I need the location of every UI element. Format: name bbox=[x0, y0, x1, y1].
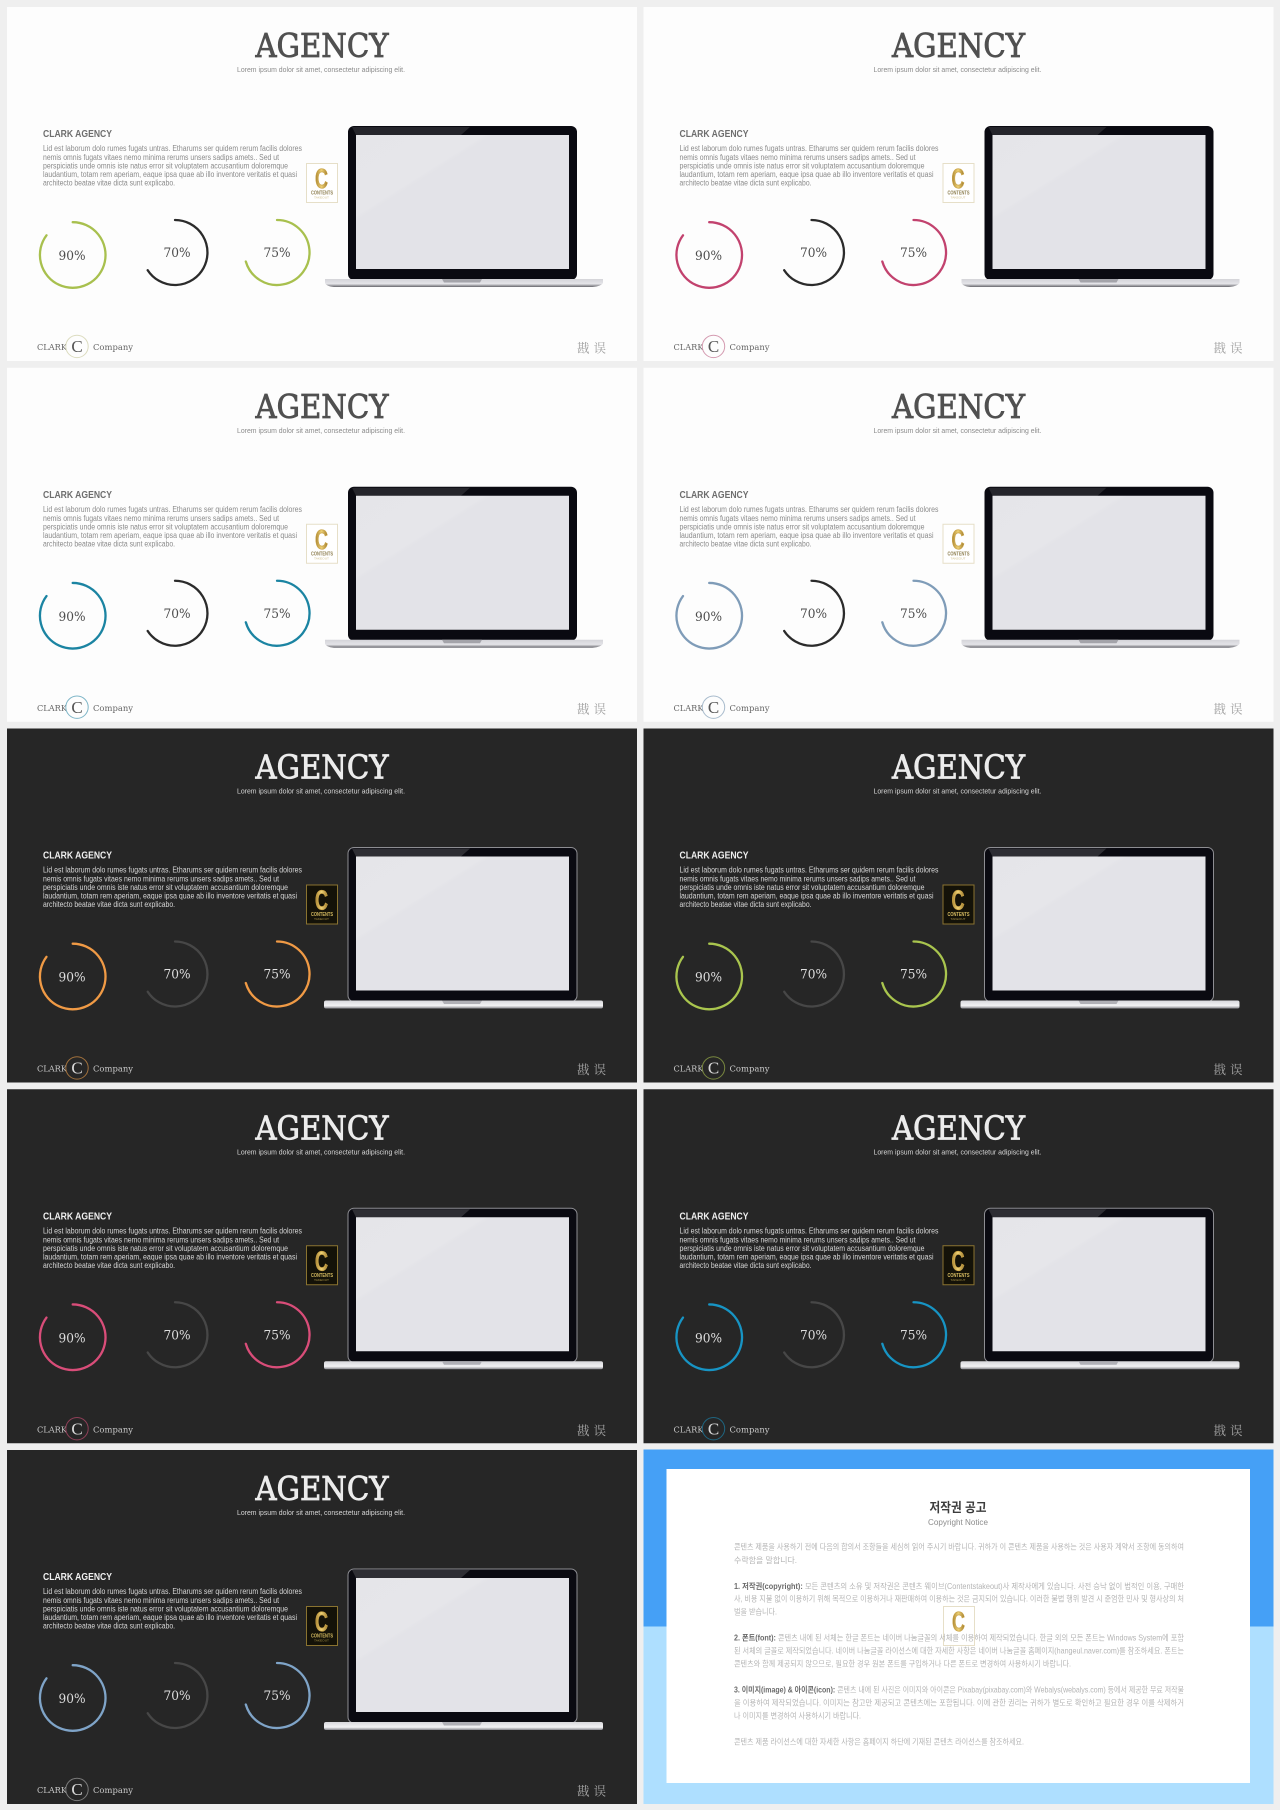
ring chart 70%: 70% bbox=[800, 968, 827, 982]
text block: nemis omnis fugats vitaes nemo minima rerums unsers sadips amets.. Sed ut bbox=[680, 514, 916, 523]
heading: CLARK AGENCY bbox=[680, 129, 749, 140]
laptop mockup bbox=[324, 1569, 603, 1730]
footer label: 戡 误 bbox=[577, 1421, 606, 1439]
text block: nemis omnis fugats vitaes nemo minima rerums unsers sadips amets.. Sed ut bbox=[43, 1235, 280, 1244]
text block: laudantium, totam rem aperiam, eaque ipsa quae ab illo inventore veritatis et quasi bbox=[43, 892, 297, 901]
copyright heading: 저작권 공고 bbox=[930, 1500, 987, 1515]
footer label: 戡 误 bbox=[577, 1782, 606, 1800]
footer logo bbox=[37, 696, 133, 718]
subtitle: Lorem ipsum dolor sit amet, consectetur adipiscing elit. bbox=[237, 426, 405, 435]
ring chart 70%: 70% bbox=[800, 1328, 827, 1343]
panel: light template, slate blue bbox=[644, 368, 1274, 722]
laptop mockup bbox=[324, 848, 603, 1008]
ring chart 75% bbox=[246, 581, 310, 646]
laptop mockup bbox=[960, 1208, 1240, 1369]
ring chart 75% bbox=[882, 1302, 946, 1367]
paragraph: font: 된 서체의 글꼴로 제작되었습니다. 네이버 나눔글꼴 라이선스에 대한 자세한 사항은 네이버 나눔글꼴 홈페이지(hangeul.naver.com)를 참조하세요. 폰트는 bbox=[734, 1646, 1184, 1656]
icon: contents badge: C bbox=[315, 1245, 328, 1276]
footer logo: CLARK bbox=[37, 704, 68, 714]
ring chart 75% bbox=[882, 942, 946, 1006]
paragraph: font: 콘텐츠와 함께 제공되지 않으므로, 필요한 경우 원본 폰트를 구입하거나 다른 폰트로 변경하여 사용하시기 바랍니다. bbox=[734, 1658, 1071, 1668]
paragraph: copyright: 1. 저작권(copyright): 모든 콘텐츠의 소유 및 저작권은 콘텐츠 웨이브(Contentstakeout)사 제작사에게 있습니다. 사전 승낙 없이 법적인 이용, 구매한 bbox=[734, 1581, 1184, 1591]
footer logo: C bbox=[71, 1058, 83, 1078]
footer label: 戡 误 bbox=[1214, 1421, 1243, 1439]
footer label: 戡 误 bbox=[1214, 699, 1243, 717]
laptop mockup bbox=[325, 487, 603, 648]
ring chart 70%: 70% bbox=[800, 246, 827, 261]
text block bbox=[43, 1587, 302, 1631]
footer label: 戡 误 bbox=[577, 1060, 606, 1078]
title: AGENCY bbox=[891, 1108, 1026, 1147]
icon: contents badge: C bbox=[952, 1245, 964, 1276]
footer logo: C bbox=[71, 1780, 83, 1799]
footer logo: Company bbox=[93, 1064, 133, 1074]
icon: contents badge bbox=[943, 163, 974, 202]
text block: perspiciatis unde omnis iste natus error sit voluptatem accusantium doloremque bbox=[43, 1605, 288, 1614]
text block: laudantium, totam rem aperiam, eaque ipsa quae ab illo inventore veritatis et quasi bbox=[43, 1252, 297, 1261]
icon: contents badge bbox=[943, 884, 974, 924]
icon: contents badge: TAKEOUT bbox=[314, 1278, 329, 1282]
footer label: 戡 误 bbox=[1214, 338, 1243, 356]
text block: Lid est laborum dolo rumes fugats untras. Etharums ser quidem rerum facilis dolores bbox=[680, 1226, 938, 1235]
heading: CLARK AGENCY bbox=[43, 850, 112, 862]
panel: dark template, orange bbox=[7, 728, 637, 1082]
text block: laudantium, totam rem aperiam, eaque ipsa quae ab illo inventore veritatis et quasi bbox=[680, 892, 934, 901]
text block: perspiciatis unde omnis iste natus error sit voluptatem accusantium doloremque bbox=[43, 1244, 288, 1253]
icon: contents badge: CONTENTS bbox=[948, 190, 970, 196]
icon: contents badge bbox=[943, 524, 974, 563]
ring chart 90% bbox=[676, 1304, 742, 1370]
paragraph: font bbox=[734, 1633, 1184, 1668]
ring chart 70% bbox=[148, 1302, 207, 1367]
heading: CLARK AGENCY bbox=[43, 1211, 112, 1222]
text block bbox=[680, 505, 938, 548]
ring chart 90% bbox=[40, 1304, 106, 1370]
heading: CLARK AGENCY bbox=[680, 490, 749, 501]
ring chart 90%: 90% bbox=[695, 249, 722, 264]
intro paragraph: 수락함을 말합니다. bbox=[734, 1555, 797, 1565]
ring chart 90% bbox=[40, 583, 106, 649]
ring chart 75%: 75% bbox=[900, 968, 927, 982]
text block bbox=[43, 1226, 302, 1270]
text block: nemis omnis fugats vitaes nemo minima rerums unsers sadips amets.. Sed ut bbox=[680, 875, 916, 884]
icon: contents badge: C bbox=[952, 1606, 965, 1637]
ring chart 70% bbox=[148, 220, 207, 285]
ring chart 75% bbox=[882, 581, 946, 646]
paragraph: images and icons: 나 이미지를 변경하여 사용하시기 바랍니다. bbox=[734, 1710, 861, 1720]
text block: Lid est laborum dolo rumes fugats untras. Etharums ser quidem rerum facilis dolores bbox=[43, 505, 302, 514]
icon: contents badge bbox=[306, 884, 338, 924]
text block: Lid est laborum dolo rumes fugats untras. Etharums ser quidem rerum facilis dolores bbox=[43, 1226, 302, 1235]
ring chart 90%: 90% bbox=[695, 1331, 722, 1346]
paragraph: font: 2. 폰트(font): 콘텐츠 내에 된 서체는 한글 폰트는 네이버 나눔글꼴의 서체를 이용하여 제작되었습니다. 한글 외의 모든 폰트는 Windows System에 포함 bbox=[734, 1633, 1184, 1643]
ring chart 75% bbox=[246, 942, 310, 1006]
ring chart 70%: 70% bbox=[164, 246, 190, 261]
text block: laudantium, totam rem aperiam, eaque ipsa quae ab illo inventore veritatis et quasi bbox=[680, 531, 934, 540]
ring chart 75%: 75% bbox=[900, 1328, 927, 1343]
footer logo: Company bbox=[730, 1064, 770, 1074]
icon: contents badge: CONTENTS bbox=[311, 1273, 334, 1279]
ring chart 70% bbox=[784, 942, 844, 1006]
icon: contents badge: TAKEOUT bbox=[950, 196, 966, 200]
text block: nemis omnis fugats vitaes nemo minima rerums unsers sadips amets.. Sed ut bbox=[680, 153, 916, 162]
icon: contents badge: CONTENTS bbox=[948, 1273, 970, 1279]
footer label: 戡 误 bbox=[1214, 1060, 1243, 1078]
footer logo: CLARK bbox=[37, 1425, 68, 1435]
laptop mockup bbox=[960, 848, 1240, 1008]
intro paragraph: 콘텐츠 제품을 사용하기 전에 다음의 합의서 조항들을 세심히 읽어 주시기 바랍니다. 귀하가 이 콘텐츠 제품을 사용하는 것은 사용자 계약서 조항에 동의하여 bbox=[734, 1542, 1184, 1552]
ring chart 75%: 75% bbox=[264, 246, 290, 261]
text block: perspiciatis unde omnis iste natus error sit voluptatem accusantium doloremque bbox=[680, 522, 925, 531]
footer logo: Company bbox=[730, 704, 770, 714]
subtitle: Lorem ipsum dolor sit amet, consectetur adipiscing elit. bbox=[874, 1147, 1042, 1156]
text block bbox=[680, 1226, 938, 1270]
ring chart 70% bbox=[148, 581, 207, 646]
icon: contents badge: C bbox=[952, 524, 964, 555]
ring chart 70%: 70% bbox=[164, 968, 190, 982]
subtitle: Lorem ipsum dolor sit amet, consectetur adipiscing elit. bbox=[237, 65, 405, 74]
heading: CLARK AGENCY bbox=[680, 850, 749, 862]
text block: perspiciatis unde omnis iste natus error sit voluptatem accusantium doloremque bbox=[43, 162, 288, 171]
footer logo: Company bbox=[93, 704, 133, 714]
closing line: 콘텐츠 제품 라이선스에 대한 자세한 사항은 홈페이지 하단에 기재된 콘텐츠 라이선스를 참조하세요. bbox=[734, 1737, 1024, 1747]
ring chart 90% bbox=[40, 222, 106, 288]
ring chart 70%: 70% bbox=[800, 607, 827, 622]
footer logo: C bbox=[71, 337, 83, 356]
icon: contents badge bbox=[306, 1606, 338, 1646]
footer label: 戡 误 bbox=[577, 699, 606, 717]
ring chart 70%: 70% bbox=[164, 1328, 190, 1343]
ring chart 90%: 90% bbox=[58, 970, 86, 986]
heading: CLARK AGENCY bbox=[43, 129, 112, 140]
panel: copyright notice bbox=[644, 1450, 1274, 1804]
panel: light template, pink bbox=[644, 7, 1274, 361]
footer logo: Company bbox=[93, 1425, 133, 1435]
ring chart 75%: 75% bbox=[264, 968, 290, 982]
ring chart 90% bbox=[40, 1665, 106, 1731]
footer logo bbox=[674, 1057, 770, 1079]
paragraph: copyright: 사, 비용 지불 없이 이용하기 위해 목적으로 이용하거나 재판매하여 이용하는 것은 금지되어 있습니다. 이러한 불법 행위 발견 시 준엄한 민사 및 형사상의 처 bbox=[734, 1594, 1184, 1604]
text block: Lid est laborum dolo rumes fugats untras. Etharums ser quidem rerum facilis dolores bbox=[680, 505, 938, 514]
title: AGENCY bbox=[891, 748, 1026, 786]
text block: architecto beatae vitae dicta sunt explicabo. bbox=[43, 900, 175, 909]
ring chart 90%: 90% bbox=[695, 970, 722, 986]
icon: contents badge: CONTENTS bbox=[948, 551, 970, 557]
icon: contents badge: C bbox=[315, 1606, 328, 1637]
icon: contents badge: CONTENTS bbox=[311, 1634, 334, 1640]
laptop mockup bbox=[962, 126, 1240, 287]
title: AGENCY bbox=[255, 748, 390, 786]
paragraph: images and icons bbox=[734, 1684, 1184, 1720]
ring chart 70% bbox=[784, 220, 844, 285]
panel: dark template, steel blue bbox=[7, 1450, 637, 1804]
ring chart 90%: 90% bbox=[58, 249, 86, 264]
icon: contents badge bbox=[306, 163, 338, 202]
text block: nemis omnis fugats vitaes nemo minima rerums unsers sadips amets.. Sed ut bbox=[43, 1596, 280, 1605]
footer logo: Company bbox=[93, 343, 133, 353]
text block: Lid est laborum dolo rumes fugats untras. Etharums ser quidem rerum facilis dolores bbox=[680, 144, 938, 153]
paragraph: copyright: 벌을 받습니다. bbox=[734, 1607, 777, 1617]
ring chart 75% bbox=[246, 220, 310, 285]
ring chart 75% bbox=[246, 1302, 310, 1367]
footer logo: CLARK bbox=[37, 343, 68, 353]
footer label: 戡 误 bbox=[577, 338, 606, 356]
ring chart 75%: 75% bbox=[264, 1689, 290, 1704]
ring chart 75%: 75% bbox=[264, 607, 290, 622]
footer logo: CLARK bbox=[674, 343, 704, 353]
text block: Lid est laborum dolo rumes fugats untras. Etharums ser quidem rerum facilis dolores bbox=[43, 1587, 302, 1596]
heading: CLARK AGENCY bbox=[43, 490, 112, 501]
ring chart 70% bbox=[148, 1663, 207, 1728]
icon: contents badge: C bbox=[315, 884, 328, 916]
text block: nemis omnis fugats vitaes nemo minima rerums unsers sadips amets.. Sed ut bbox=[43, 875, 280, 884]
footer logo bbox=[37, 1417, 133, 1440]
text block: perspiciatis unde omnis iste natus error sit voluptatem accusantium doloremque bbox=[680, 1244, 925, 1253]
ring chart 75%: 75% bbox=[900, 607, 927, 622]
subtitle: Lorem ipsum dolor sit amet, consectetur adipiscing elit. bbox=[237, 1508, 405, 1517]
subtitle: Lorem ipsum dolor sit amet, consectetur adipiscing elit. bbox=[874, 65, 1042, 74]
text block: perspiciatis unde omnis iste natus error sit voluptatem accusantium doloremque bbox=[43, 522, 288, 531]
text block: Lid est laborum dolo rumes fugats untras. Etharums ser quidem rerum facilis dolores bbox=[680, 866, 938, 875]
subtitle: Lorem ipsum dolor sit amet, consectetur adipiscing elit. bbox=[874, 786, 1042, 796]
footer logo: Company bbox=[730, 1425, 770, 1435]
ring chart 70% bbox=[784, 1302, 844, 1367]
text block: nemis omnis fugats vitaes nemo minima rerums unsers sadips amets.. Sed ut bbox=[680, 1235, 916, 1244]
text block: perspiciatis unde omnis iste natus error sit voluptatem accusantium doloremque bbox=[43, 883, 288, 892]
text block: laudantium, totam rem aperiam, eaque ipsa quae ab illo inventore veritatis et quasi bbox=[43, 531, 297, 540]
ring chart 70%: 70% bbox=[164, 607, 190, 622]
text block: Lid est laborum dolo rumes fugats untras. Etharums ser quidem rerum facilis dolores bbox=[43, 866, 302, 875]
subtitle: Lorem ipsum dolor sit amet, consectetur adipiscing elit. bbox=[874, 426, 1042, 435]
panel: light template, green bbox=[7, 7, 637, 361]
text block bbox=[680, 866, 938, 909]
ring chart 90%: 90% bbox=[58, 1692, 86, 1707]
ring chart 90%: 90% bbox=[58, 1331, 86, 1346]
footer logo: CLARK bbox=[37, 1064, 68, 1074]
heading: CLARK AGENCY bbox=[43, 1572, 112, 1583]
ring chart 70% bbox=[148, 942, 207, 1006]
icon: contents badge bbox=[944, 1606, 974, 1646]
footer logo bbox=[674, 696, 770, 718]
footer logo: Company bbox=[93, 1786, 133, 1796]
ring chart 90% bbox=[676, 222, 742, 288]
footer logo: C bbox=[71, 1419, 83, 1438]
ring chart 90% bbox=[676, 944, 742, 1009]
footer logo: CLARK bbox=[674, 1064, 704, 1074]
title: AGENCY bbox=[255, 387, 390, 426]
text block: perspiciatis unde omnis iste natus error sit voluptatem accusantium doloremque bbox=[680, 883, 925, 892]
intro paragraph bbox=[734, 1542, 1184, 1565]
icon: contents badge: TAKEOUT bbox=[950, 1278, 966, 1282]
footer logo: C bbox=[708, 1419, 719, 1438]
title: AGENCY bbox=[255, 1469, 390, 1508]
ring chart 90%: 90% bbox=[695, 610, 722, 625]
panel: dark template, pink bbox=[7, 1089, 637, 1443]
text block: architecto beatae vitae dicta sunt explicabo. bbox=[43, 179, 175, 188]
text block bbox=[680, 144, 938, 188]
text block: architecto beatae vitae dicta sunt explicabo. bbox=[680, 1261, 812, 1270]
footer logo: CLARK bbox=[37, 1786, 68, 1796]
icon: contents badge bbox=[306, 524, 338, 563]
ring chart 90% bbox=[40, 944, 106, 1009]
icon: contents badge: CONTENTS bbox=[311, 551, 334, 557]
text block: perspiciatis unde omnis iste natus error sit voluptatem accusantium doloremque bbox=[680, 162, 925, 171]
icon: contents badge: CONTENTS bbox=[311, 912, 334, 918]
laptop mockup bbox=[324, 1208, 603, 1369]
icon: contents badge: C bbox=[952, 884, 964, 916]
footer logo: Company bbox=[730, 343, 770, 353]
paragraph: images and icons: 을 이용하여 제작되었습니다. 이미지는 참고만 제공되고 콘텐츠에는 포함됩니다. 이에 관한 권리는 귀하가 별도로 확인하고 필요한 경우 이를 삭제하거 bbox=[734, 1698, 1184, 1708]
text block: laudantium, totam rem aperiam, eaque ipsa quae ab illo inventore veritatis et quasi bbox=[43, 1613, 297, 1622]
paragraph: copyright bbox=[734, 1581, 1184, 1617]
footer logo: CLARK bbox=[674, 704, 704, 714]
text block: architecto beatae vitae dicta sunt explicabo. bbox=[43, 539, 175, 548]
footer logo bbox=[674, 335, 770, 358]
icon: contents badge: TAKEOUT bbox=[950, 917, 966, 921]
footer logo: C bbox=[708, 337, 719, 356]
panel: dark template, blue bbox=[644, 1089, 1274, 1443]
footer logo: CLARK bbox=[674, 1425, 704, 1435]
footer logo bbox=[674, 1417, 770, 1440]
copyright subheading: Copyright Notice bbox=[928, 1517, 988, 1527]
icon: contents badge: C bbox=[315, 524, 328, 555]
icon: contents badge: TAKEOUT bbox=[950, 556, 966, 560]
ring chart 70% bbox=[784, 581, 844, 646]
text block: architecto beatae vitae dicta sunt explicabo. bbox=[680, 900, 812, 909]
icon: contents badge bbox=[306, 1245, 338, 1285]
title: AGENCY bbox=[891, 26, 1026, 65]
subtitle: Lorem ipsum dolor sit amet, consectetur adipiscing elit. bbox=[237, 1147, 405, 1156]
title: AGENCY bbox=[891, 387, 1026, 426]
icon: contents badge: TAKEOUT bbox=[314, 917, 329, 921]
title: AGENCY bbox=[255, 26, 390, 65]
panel: dark template, green bbox=[644, 728, 1274, 1082]
text block: architecto beatae vitae dicta sunt explicabo. bbox=[43, 1622, 175, 1631]
icon: contents badge: CONTENTS bbox=[311, 190, 334, 196]
text block: nemis omnis fugats vitaes nemo minima rerums unsers sadips amets.. Sed ut bbox=[43, 514, 280, 523]
icon: contents badge: C bbox=[952, 163, 964, 194]
text block bbox=[43, 505, 302, 548]
text block bbox=[43, 866, 302, 909]
text block: laudantium, totam rem aperiam, eaque ipsa quae ab illo inventore veritatis et quasi bbox=[680, 170, 934, 179]
text block: architecto beatae vitae dicta sunt explicabo. bbox=[680, 179, 812, 188]
icon: contents badge: TAKEOUT bbox=[314, 1638, 329, 1642]
icon: contents badge: TAKEOUT bbox=[314, 556, 329, 560]
text block: laudantium, totam rem aperiam, eaque ipsa quae ab illo inventore veritatis et quasi bbox=[43, 170, 297, 179]
footer logo bbox=[37, 335, 133, 358]
ring chart 75%: 75% bbox=[264, 1328, 290, 1343]
footer logo: C bbox=[708, 1058, 719, 1078]
icon: contents badge: C bbox=[315, 163, 328, 194]
heading: CLARK AGENCY bbox=[680, 1211, 749, 1222]
text block: laudantium, totam rem aperiam, eaque ipsa quae ab illo inventore veritatis et quasi bbox=[680, 1252, 934, 1261]
footer logo bbox=[37, 1778, 133, 1801]
footer logo: C bbox=[708, 698, 719, 717]
panel: light template, teal bbox=[7, 368, 637, 722]
paragraph: images and icons: 3. 이미지(image) & 아이콘(icon): 콘텐츠 내에 된 사진은 이미지와 아이콘은 Pixabay(pixabay.com)와 Webalys(webalys.com) 등에서 제공한 무료 저작물 bbox=[734, 1684, 1184, 1694]
ring chart 90% bbox=[676, 583, 742, 649]
text block: nemis omnis fugats vitaes nemo minima rerums unsers sadips amets.. Sed ut bbox=[43, 153, 280, 162]
text block bbox=[43, 144, 302, 188]
icon: contents badge: TAKEOUT bbox=[314, 196, 329, 200]
text block: Lid est laborum dolo rumes fugats untras. Etharums ser quidem rerum facilis dolores bbox=[43, 144, 302, 153]
title: AGENCY bbox=[255, 1108, 390, 1147]
laptop mockup bbox=[325, 126, 603, 287]
text block: architecto beatae vitae dicta sunt explicabo. bbox=[680, 539, 812, 548]
footer logo: C bbox=[71, 698, 83, 717]
ring chart 90%: 90% bbox=[58, 610, 86, 625]
ring chart 75% bbox=[882, 220, 946, 285]
text block: architecto beatae vitae dicta sunt explicabo. bbox=[43, 1261, 175, 1270]
footer logo bbox=[37, 1057, 133, 1079]
ring chart 70%: 70% bbox=[164, 1689, 190, 1704]
icon: contents badge: CONTENTS bbox=[948, 912, 970, 918]
subtitle: Lorem ipsum dolor sit amet, consectetur adipiscing elit. bbox=[237, 786, 405, 796]
ring chart 75% bbox=[246, 1663, 310, 1728]
ring chart 75%: 75% bbox=[900, 246, 927, 261]
laptop mockup bbox=[962, 487, 1240, 648]
icon: contents badge bbox=[943, 1245, 974, 1285]
